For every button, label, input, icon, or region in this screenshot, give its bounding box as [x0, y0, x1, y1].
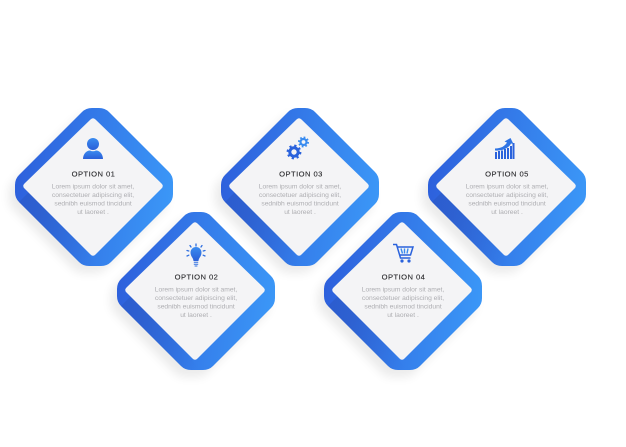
text: description 03	[259, 184, 341, 216]
text: description 02: consectetuer adipiscing elit,	[155, 295, 237, 302]
heading: option 01: OPTION 01	[72, 170, 115, 178]
text: description 05: Lorem ipsum dolor sit amet,	[466, 184, 548, 190]
text: description 04: Lorem ipsum dolor sit amet,	[362, 286, 444, 294]
text: description 03: Lorem ipsum dolor sit amet,	[259, 184, 341, 190]
card: option 01	[9, 108, 173, 273]
heading: option 03: OPTION 03	[279, 170, 323, 178]
text: description 01	[52, 184, 134, 216]
card: option 03	[215, 108, 379, 273]
icon: gears	[288, 137, 308, 158]
icon: growth chart with arrow	[495, 138, 514, 159]
text: description 04: consectetuer adipiscing elit,	[362, 295, 444, 302]
text: description 02: Lorem ipsum dolor sit amet,	[155, 286, 237, 294]
icon: person	[83, 138, 103, 159]
icon: shopping cart	[393, 244, 413, 263]
text: description 02	[155, 286, 237, 319]
card: option 04	[318, 212, 482, 377]
text: description 05	[466, 184, 548, 216]
text: description 01: Lorem ipsum dolor sit amet,	[52, 184, 134, 190]
card: option 02	[111, 212, 275, 377]
text: description 03: sednibh euismod tincidunt	[261, 200, 339, 208]
text: description 03: consectetuer adipiscing elit,	[259, 192, 341, 199]
heading: option 02: OPTION 02	[175, 272, 218, 282]
text: description 01: ut laoreet .	[77, 209, 109, 216]
heading: option 04: OPTION 04	[382, 272, 425, 282]
text: description 05: ut laoreet .	[491, 209, 523, 216]
text: description 05: sednibh euismod tincidunt	[468, 200, 546, 208]
icon: light bulb	[187, 244, 205, 266]
heading: option 05: OPTION 05	[485, 170, 529, 178]
card: option 05	[422, 108, 586, 273]
text: description 03: ut laoreet .	[284, 209, 316, 216]
text: description 02: sednibh euismod tincidunt	[157, 304, 235, 310]
text: description 04: ut laoreet .	[387, 312, 419, 319]
text: description 01: sednibh euismod tincidunt	[54, 200, 132, 208]
text: description 04	[362, 286, 444, 319]
text: description 05: consectetuer adipiscing elit,	[466, 192, 548, 199]
text: description 01: consectetuer adipiscing elit,	[52, 192, 134, 199]
text: description 02: ut laoreet .	[180, 312, 212, 319]
text: description 04: sednibh euismod tincidunt	[364, 304, 442, 310]
